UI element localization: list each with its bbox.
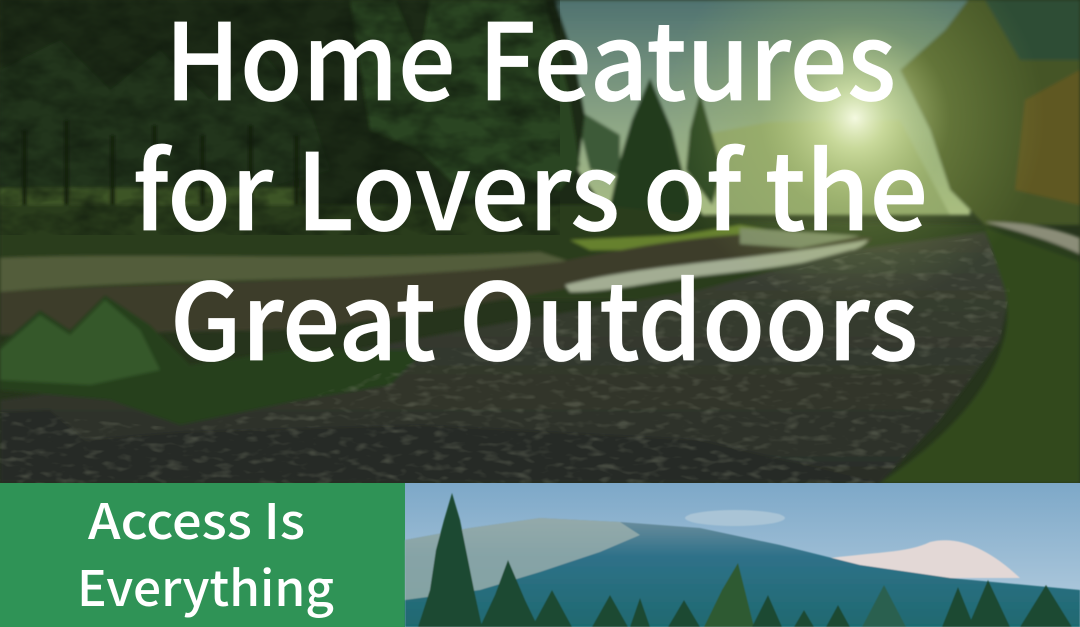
grass right margin: [880, 228, 1080, 483]
bottom-left dark rocks: [0, 410, 880, 483]
clouds: [830, 540, 1020, 578]
centre conifers: [609, 78, 704, 218]
pine trees: [418, 493, 1072, 627]
title: for Lovers of the: [133, 107, 928, 261]
heading: Access Is Everything: Access Is: [88, 483, 305, 554]
photo: mountain and pine trees: [405, 483, 1080, 627]
mountain: [405, 518, 1080, 627]
road on right: [985, 222, 1080, 254]
right hillside forest: [900, 0, 1080, 225]
lit forest patch centre-left: [350, 0, 580, 200]
sun glow: [691, 0, 1020, 286]
far bank left, stony: [0, 252, 590, 292]
hero photo: forest river landscape: [0, 0, 1080, 483]
sky behind the trees: [540, 0, 970, 215]
river: [0, 232, 872, 335]
forest and grass texture: [0, 0, 560, 235]
title: Great Outdoors: [170, 237, 918, 391]
tree gaps above the meadow: [0, 188, 300, 208]
meadow band: [0, 205, 1080, 300]
rock texture: [0, 230, 1080, 483]
heading: Access Is Everything: [77, 483, 334, 621]
title: [133, 0, 928, 391]
distant hill: [575, 108, 620, 175]
panel: section heading: [0, 483, 405, 627]
heading: Access Is Everything: Everything: [77, 550, 334, 621]
left dark forest: [0, 0, 599, 208]
shrubs left: [0, 295, 425, 425]
trunks: [22, 120, 299, 210]
rocky foreground: [0, 232, 1010, 483]
